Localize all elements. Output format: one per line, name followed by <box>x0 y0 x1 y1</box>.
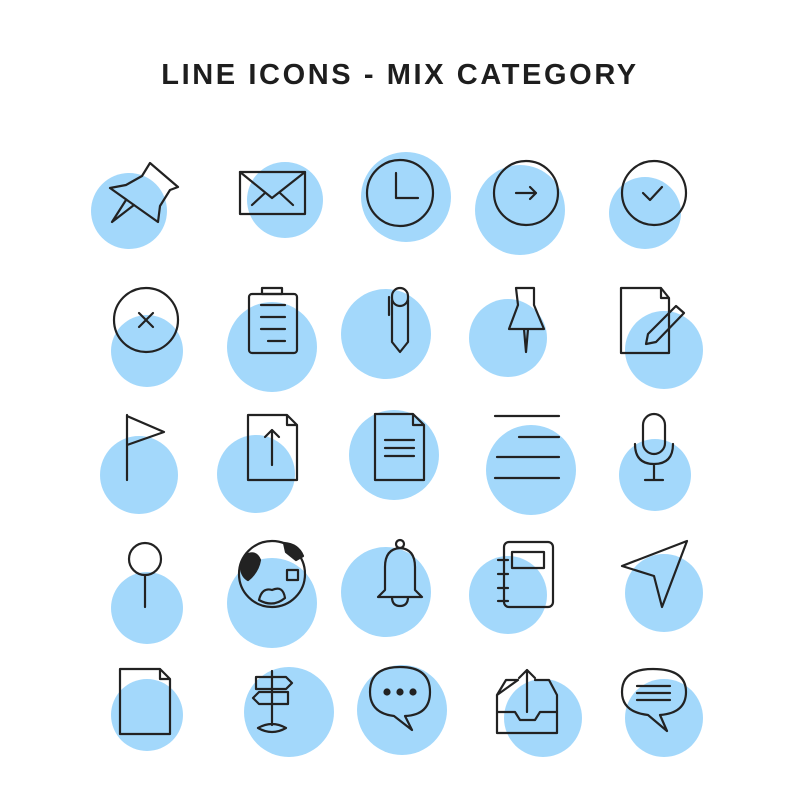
icon: chat dots <box>370 667 430 730</box>
title: LINE ICONS - MIX CATEGORY <box>161 59 639 91</box>
icon: clipboard <box>249 288 297 353</box>
icon: inbox upload <box>497 670 557 733</box>
icon: clock <box>367 160 433 226</box>
icon: pushpin tilted <box>110 163 178 222</box>
icon: blank file <box>120 669 170 734</box>
icon: file upload <box>248 415 297 480</box>
icon: paper plane <box>622 541 687 607</box>
icon: arrow circle <box>494 161 558 225</box>
icon: map pin <box>129 543 161 607</box>
icon: check circle <box>622 161 686 225</box>
icon: document <box>375 414 424 480</box>
icon: envelope <box>240 172 305 214</box>
icon: text align <box>495 416 559 478</box>
icon: microphone <box>635 414 673 480</box>
icon: bell <box>378 540 422 606</box>
icon: document edit <box>621 288 684 353</box>
icon: signpost <box>253 671 292 732</box>
icon: globe <box>239 541 305 607</box>
icon: pen <box>389 288 408 352</box>
icon: x circle <box>114 288 178 352</box>
icon: chat lines <box>622 669 686 731</box>
icon: flag <box>127 415 164 480</box>
icon: notebook <box>498 542 553 607</box>
icon: pushpin <box>509 288 544 352</box>
